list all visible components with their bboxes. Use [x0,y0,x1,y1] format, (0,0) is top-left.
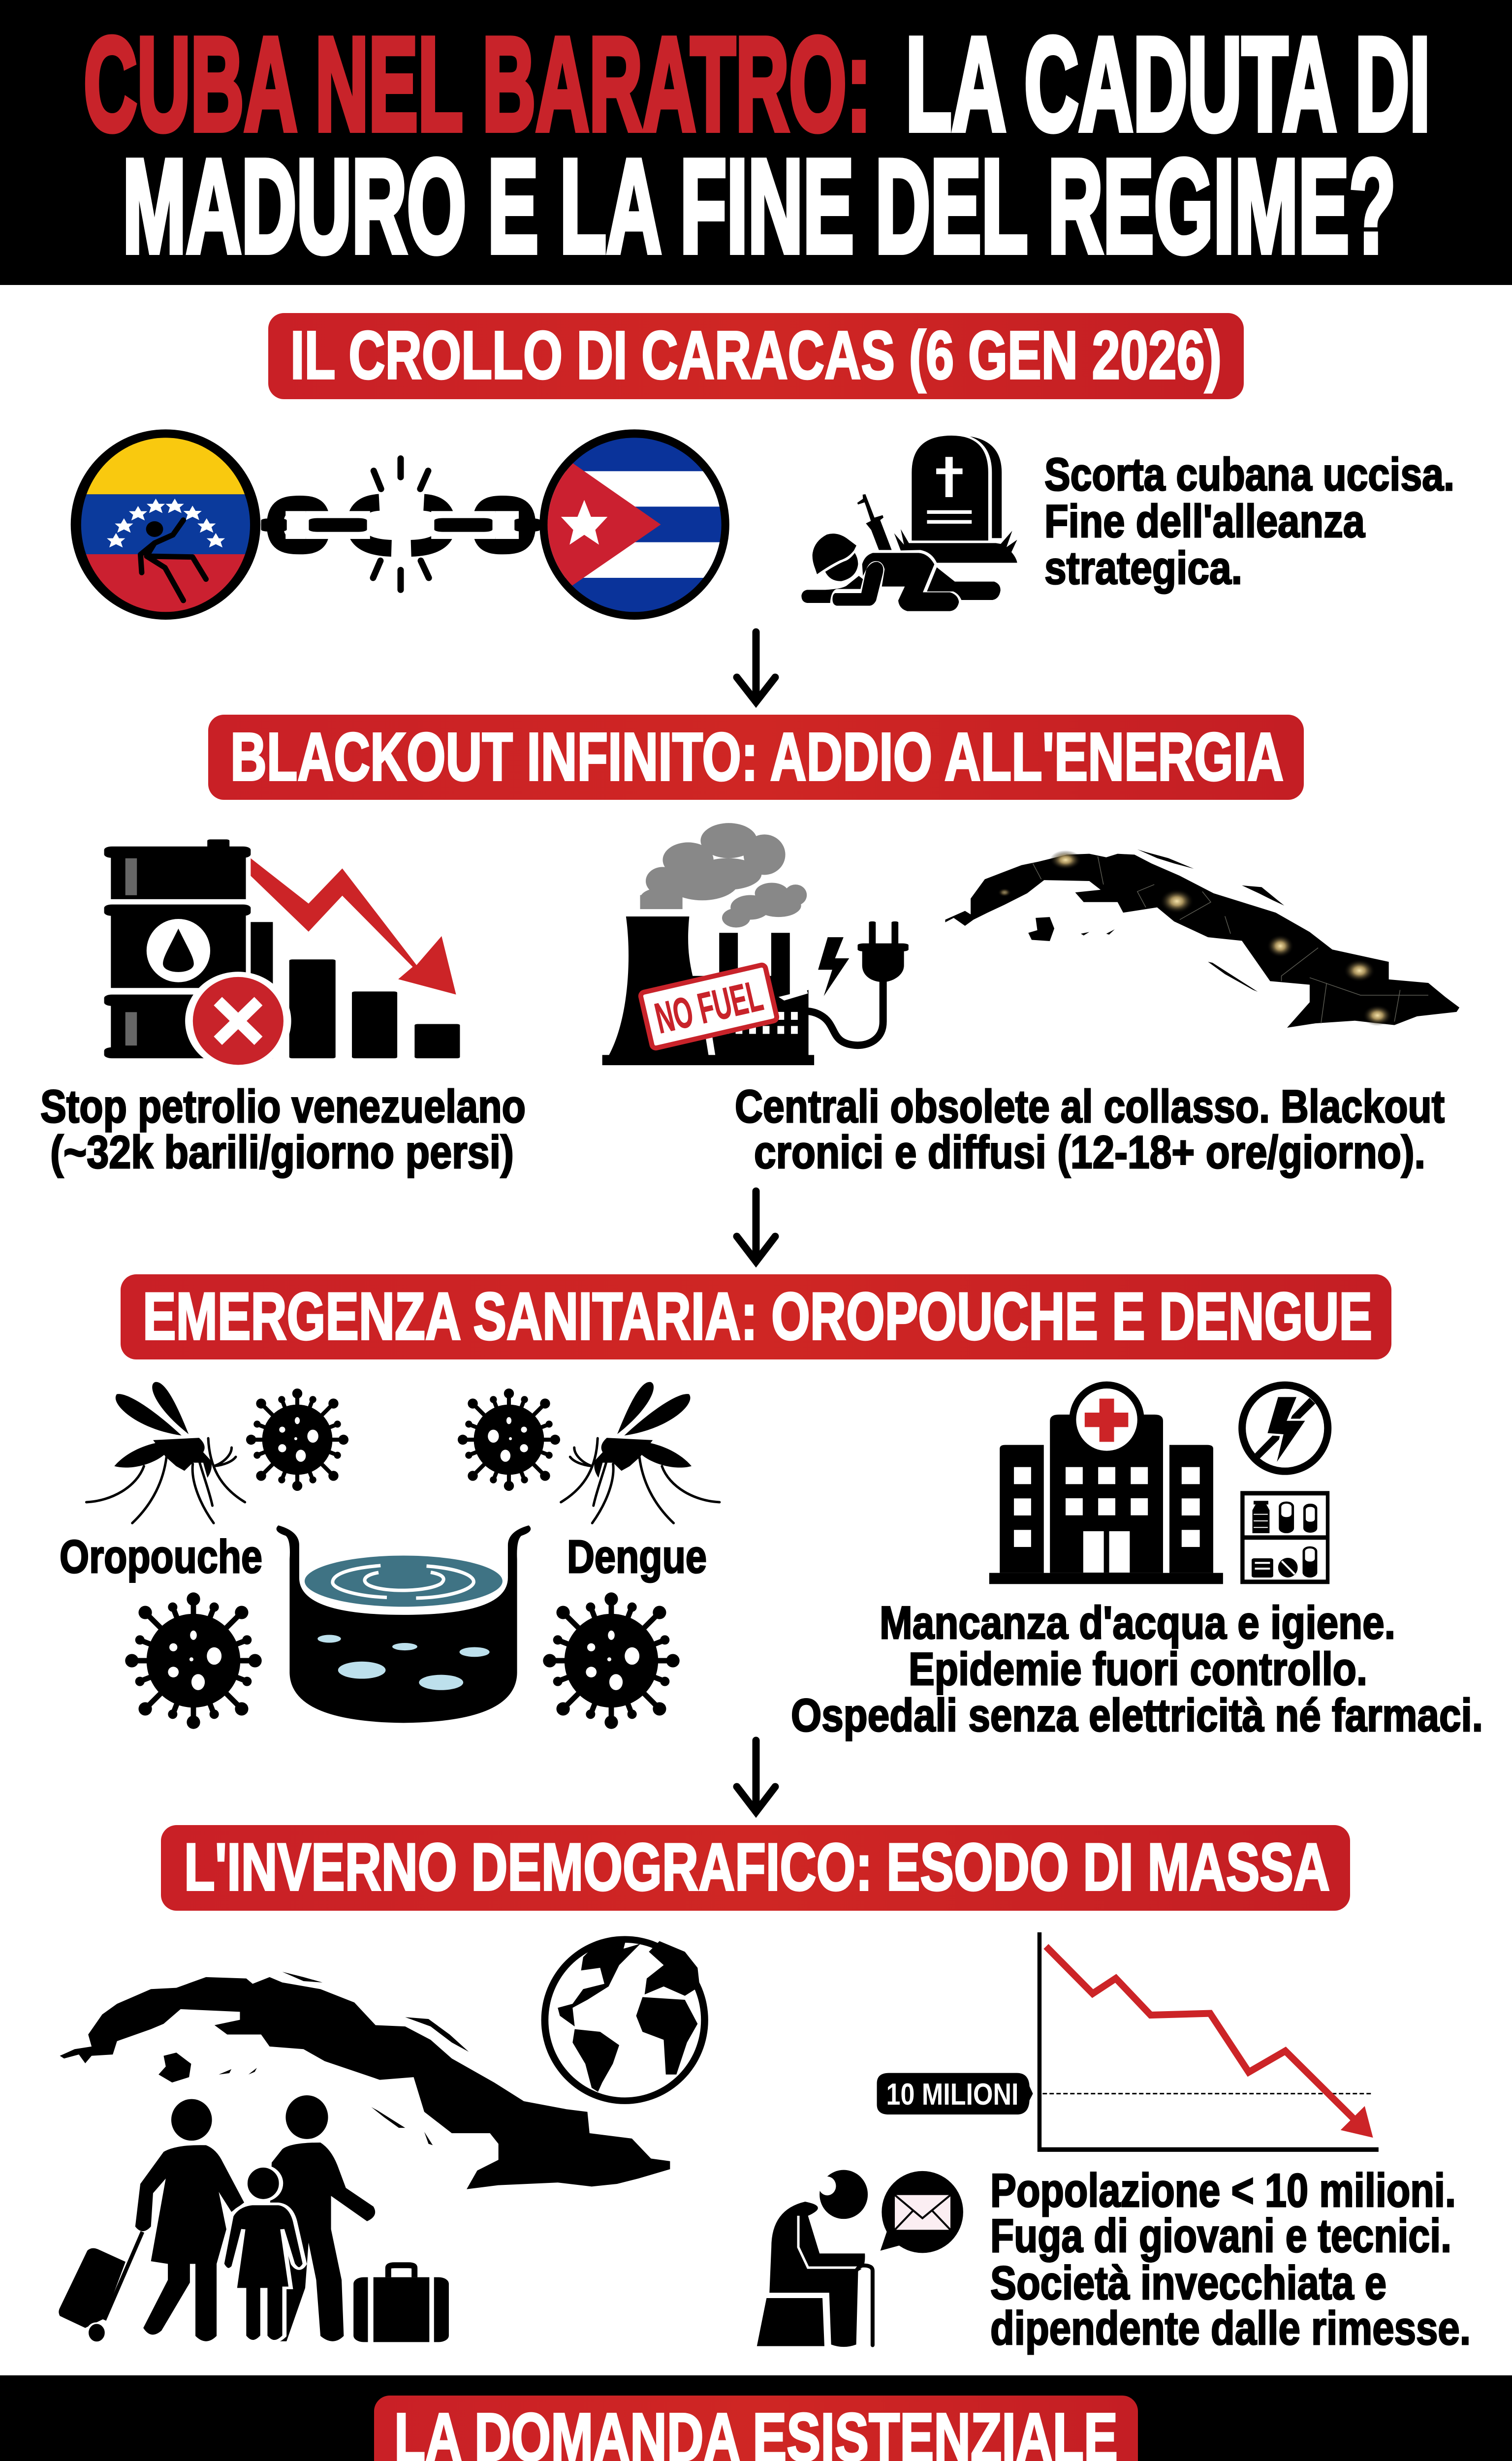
text: scorta cubana uccisa: strategica. [1044,542,1242,594]
icon: mosquito left [86,1382,245,1523]
heading: il crollo di Caracas: IL CROLLO DI CARACAS (6 GEN 2026) [290,317,1222,393]
icon: Cuba flag [536,429,731,620]
icon: broken chain [261,459,540,590]
icon: fallen soldier with rifle [801,494,1017,611]
map: dark Cuba with few lights [945,850,1459,1028]
icon: power plant [602,823,909,1065]
map: Cuba silhouette [60,1972,670,2189]
icon: virus small left [246,1388,348,1491]
chart line: declining population [1046,1947,1373,2138]
chart axes [1038,1932,1379,2152]
label: dengue: Dengue [567,1531,707,1583]
panel: header [0,0,1512,285]
icon: migrant family [59,2095,449,2342]
icon: water container [277,1525,531,1723]
icon: virus large left [125,1592,262,1729]
icon: no electricity [1238,1382,1331,1475]
chart: population decline [877,1932,1379,2152]
icon: elderly person seated [757,2170,873,2347]
arrow 3 [737,1740,775,1812]
icon: medicine cabinet [1240,1491,1329,1584]
icon: message bubble with envelope [881,2171,963,2253]
title [84,10,1430,281]
panel: la domanda esistenziale [0,2375,1512,2461]
text: popolazione: Società invecchiata e [990,2257,1386,2309]
panel: blackout infinito [40,715,1459,1178]
icon: gravestone [912,436,1002,540]
text: stop petrolio: Stop petrolio venezuelano [40,1080,526,1132]
text: mancanza d'acqua: Epidemie fuori controllo. [909,1643,1367,1695]
icon: oil barrel and falling bars [104,839,460,1070]
title: CUBA NEL BARATRO: [84,10,871,158]
icon: virus large right [543,1592,680,1729]
text: scorta cubana uccisa [1044,448,1454,594]
text: mancanza d'acqua: Mancanza d'acqua e igiene. [880,1597,1395,1648]
text: scorta cubana uccisa: Fine dell'alleanza [1044,495,1365,547]
text: mancanza d'acqua [791,1597,1483,1741]
arrow 2 [737,1191,775,1262]
text: centrali obsolete [735,1080,1445,1178]
text: popolazione [990,2164,1471,2355]
icons: flags and broken chain [71,429,1002,620]
panel: emergenza sanitaria [60,1274,1483,1741]
heading: il crollo di Caracas [268,313,1244,399]
panel: inverno demografico [59,1825,1471,2355]
sign: no fuel [640,964,778,1049]
panel: il crollo di Caracas [71,313,1454,620]
arrow 1 [737,632,775,702]
icon: virus small right [458,1388,560,1491]
label: oropouche: Oropouche [60,1531,262,1583]
icon: hospital [989,1382,1223,1584]
icon: mosquito right [561,1382,720,1523]
text: stop petrolio [40,1080,526,1178]
icon: Venezuela flag with falling figure [71,429,260,620]
sign: no fuel: NO FUEL [651,971,767,1042]
icon: globe [541,1936,708,2104]
chart label: 10 milioni: 10 MILIONI [886,2078,1019,2112]
text: stop petrolio: (~32k barili/giorno persi) [50,1126,514,1178]
